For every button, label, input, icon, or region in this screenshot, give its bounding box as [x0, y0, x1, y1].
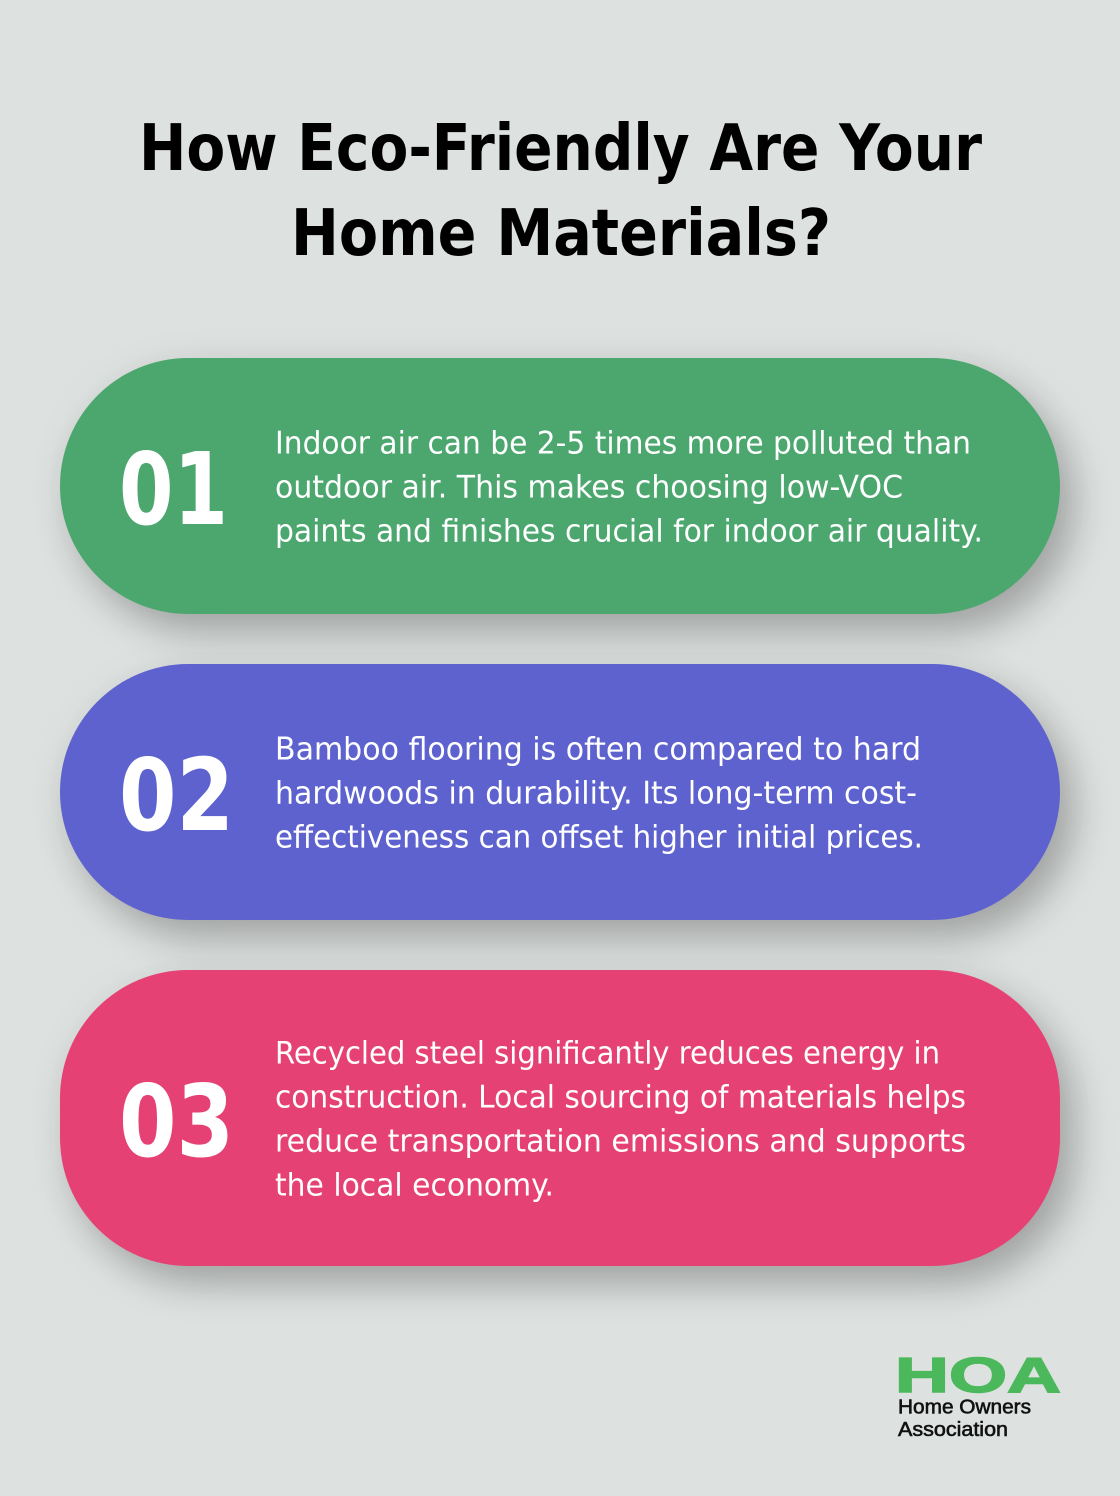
text block 01: outdoor air. This makes choosing low-VOC: [275, 470, 903, 506]
logo: HOA Home Owners Association: HOA: [895, 1349, 1061, 1403]
text block 01: Indoor air can be 2-5 times more polluted than: [275, 426, 971, 462]
number 01: 01: [119, 431, 228, 548]
text block 03: Recycled steel significantly reduces energy in: [275, 1036, 940, 1072]
text block 03: reduce transportation emissions and supports: [275, 1124, 966, 1160]
title: How Eco-Friendly Are Your: [139, 112, 982, 186]
logo: HOA Home Owners Association: Association: [898, 1419, 1008, 1441]
panel: card 03 background: [60, 970, 1060, 1266]
number 02: 02: [119, 737, 234, 854]
text block 03: [275, 1036, 966, 1204]
text block 01: paints and finishes crucial for indoor air quality.: [275, 514, 983, 550]
card 03 content: [119, 1036, 966, 1204]
title: [139, 112, 982, 271]
text block 01: [275, 426, 983, 550]
text block 02: [275, 732, 923, 856]
panel: card 02 background: [60, 664, 1060, 920]
panel: card 01 background: [60, 358, 1060, 614]
text block 02: hardwoods in durability. Its long-term cost-: [275, 776, 917, 812]
title: Home Materials?: [291, 197, 831, 271]
text block 03: the local economy.: [275, 1168, 554, 1204]
card 01 content: [119, 426, 983, 550]
card 02 content: [119, 732, 923, 856]
text block 02: Bamboo flooring is often compared to hard: [275, 732, 921, 768]
number 03: 03: [119, 1063, 234, 1180]
text block 02: effectiveness can offset higher initial prices.: [275, 820, 923, 856]
logo: HOA Home Owners Association: Home Owners: [898, 1396, 1031, 1418]
text block 03: construction. Local sourcing of materials helps: [275, 1080, 966, 1116]
logo: HOA Home Owners Association: [895, 1349, 1061, 1441]
